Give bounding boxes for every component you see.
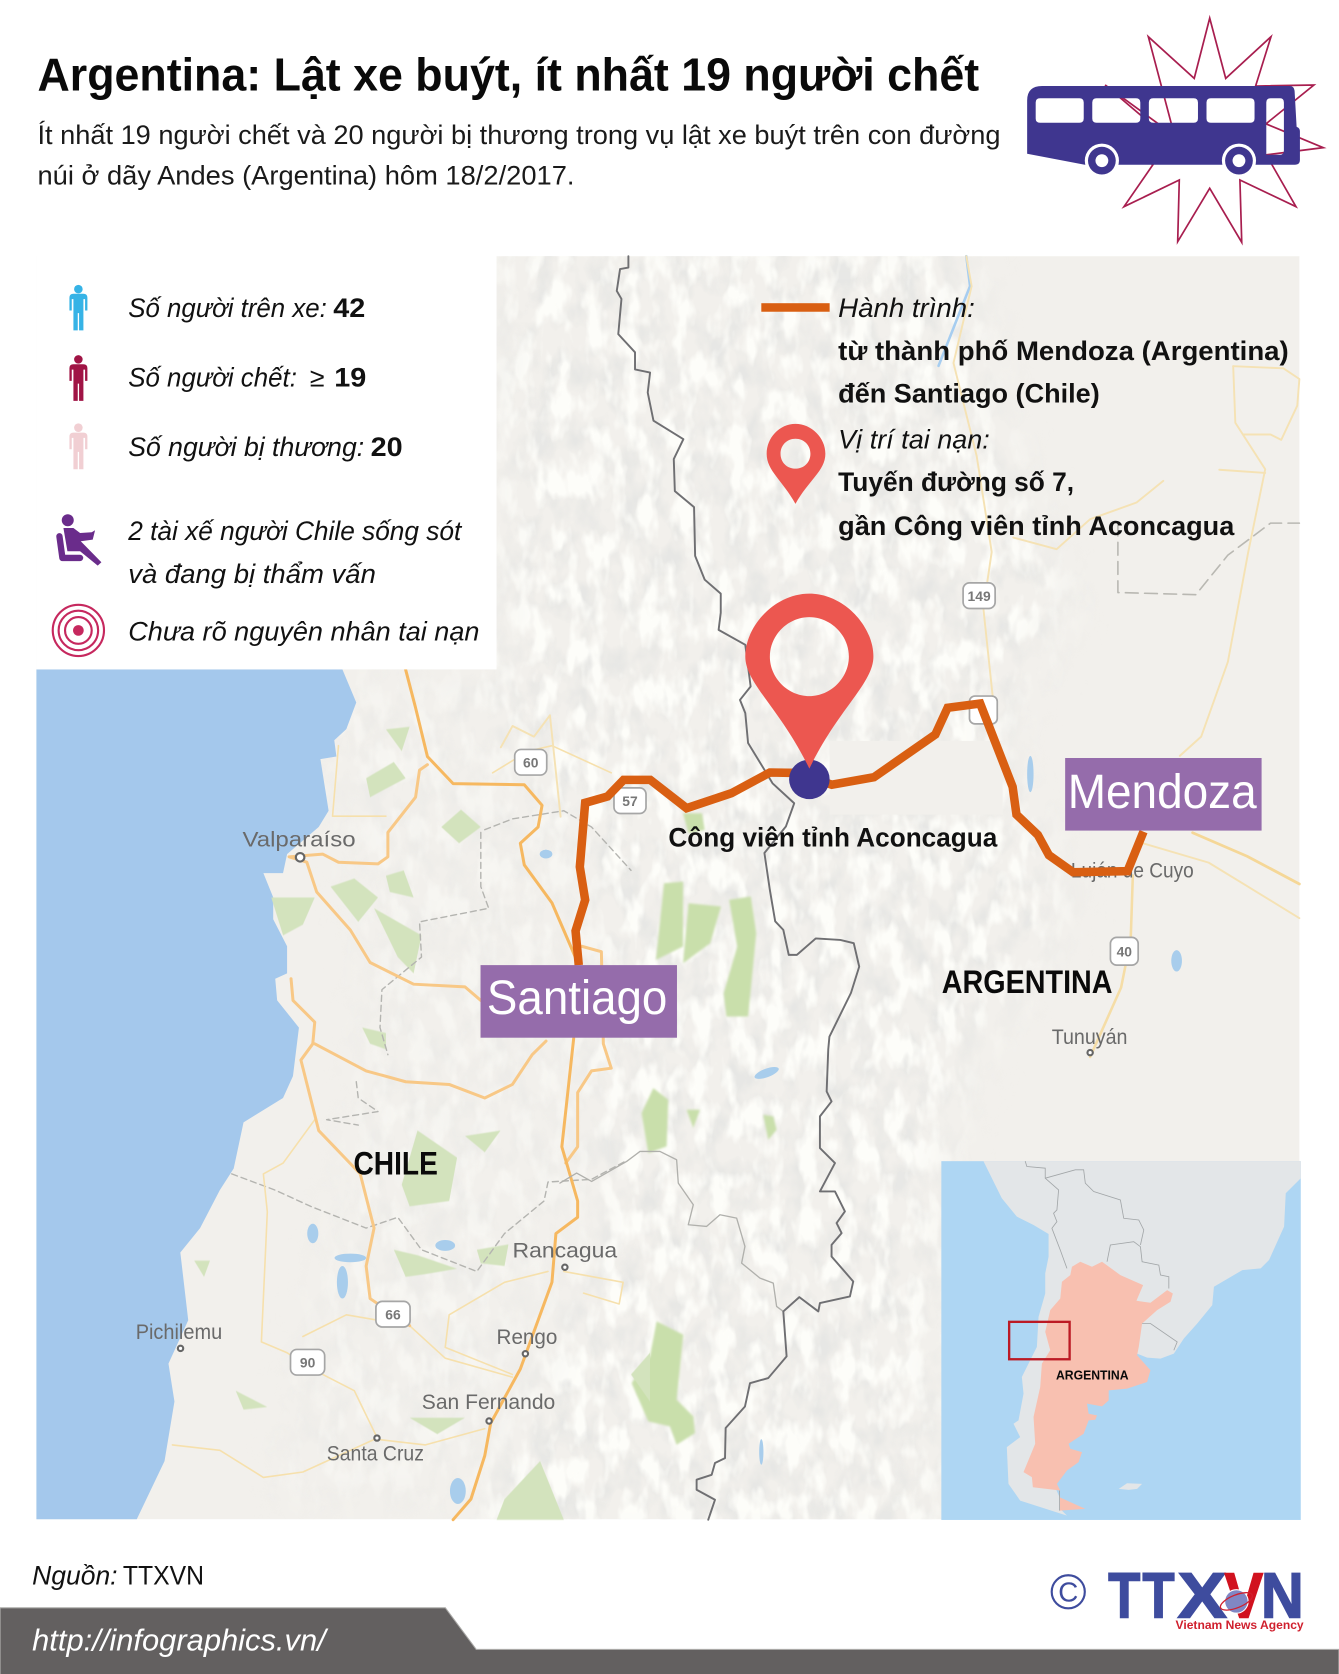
label: CHILE: CHILE	[353, 1145, 438, 1181]
label: Mendoza: Mendoza	[1068, 766, 1257, 819]
city labels: Rengo	[497, 1325, 557, 1349]
icon: person blue	[69, 294, 87, 330]
pale area around route	[830, 741, 1003, 815]
logo: TTXVN: X	[1178, 1559, 1227, 1631]
fact: injured: 20	[371, 432, 403, 462]
Pacific ocean	[36, 669, 356, 1519]
green parks west	[194, 727, 650, 1520]
road shields: 60	[523, 755, 539, 771]
fact: drivers	[127, 516, 463, 589]
road shields: 149	[968, 588, 991, 604]
icon: crashed bus with starburst	[1027, 18, 1323, 242]
label: Công viên tỉnh Aconcagua: Công viên tỉnh Aconcagua	[668, 822, 998, 853]
road shields: 57	[622, 793, 638, 809]
fact: drivers: 2 tài xế người Chile sống sót	[127, 516, 463, 546]
logo: TTXVN: Vietnam News Agency	[1176, 1618, 1304, 1632]
city labels: Santa Cruz	[327, 1441, 424, 1465]
logo: TTXVN: T	[1108, 1559, 1140, 1631]
fact: people on bus: 42	[333, 293, 365, 323]
logo: TTXVN: T	[1142, 1559, 1174, 1631]
legend: accident location: Vị trí tai nạn:	[838, 424, 990, 454]
intro text	[37, 120, 1000, 191]
fact: people on bus: Số người trên xe:	[128, 293, 327, 323]
map of Chile and Argentina	[36, 256, 1299, 1520]
source	[32, 1560, 204, 1590]
Argentina roads and Andes border	[501, 256, 1299, 1520]
road shields: 66	[385, 1307, 401, 1323]
intro text: núi ở dãy Andes (Argentina) hôm 18/2/2017.	[37, 161, 574, 191]
label: Santiago: Santiago	[487, 972, 667, 1025]
fact: injured: Số người bị thương:	[128, 432, 364, 462]
legend: route: từ thành phố Mendoza (Argentina)	[838, 336, 1289, 366]
route line Santiago to Mendoza	[576, 704, 1144, 965]
road shields: 40	[1117, 944, 1132, 960]
logo: TTXVN: C	[1058, 1576, 1078, 1607]
city labels: Valparaíso	[242, 828, 356, 852]
city labels: Luján de Cuyo	[1071, 859, 1194, 883]
legend: accident location: Tuyến đường số 7,	[838, 467, 1074, 497]
source: TTXVN	[123, 1560, 204, 1590]
label: inset ARGENTINA: ARGENTINA	[1056, 1367, 1129, 1382]
city labels	[136, 828, 1194, 1465]
city labels: San Fernando	[422, 1390, 555, 1414]
legend: route	[761, 293, 1289, 408]
legend: route: Hành trình:	[838, 293, 975, 323]
blue location dot	[789, 760, 830, 799]
fact: deaths: ≥	[310, 362, 324, 392]
label: ARGENTINA: ARGENTINA	[942, 964, 1113, 1000]
icon head blue	[74, 285, 83, 293]
fact: deaths: Số người chết:	[128, 362, 297, 392]
source: Nguồn:	[32, 1560, 118, 1590]
legend: accident location	[767, 424, 1235, 541]
city labels: Pichilemu	[136, 1320, 222, 1344]
fact: drivers: và đang bị thẩm vấn	[128, 559, 376, 589]
Argentina	[1024, 1262, 1173, 1491]
land mass	[983, 1161, 1301, 1516]
logo: TTXVN	[1052, 1559, 1304, 1632]
icon head pink	[74, 423, 83, 432]
footer bar	[0, 1608, 1339, 1674]
panel: key facts	[36, 255, 497, 669]
icon head red	[74, 355, 83, 364]
fact: deaths: 19	[334, 362, 366, 392]
title: Argentina: Lật xe buýt, ít nhất 19 người chết	[37, 49, 979, 101]
Chile roads	[172, 670, 631, 1520]
accident location pin	[745, 594, 873, 799]
icon: person pink	[69, 433, 87, 469]
legend: route: đến Santiago (Chile)	[838, 378, 1100, 408]
icon: driver with seat belt	[59, 514, 101, 566]
road shields	[291, 583, 1138, 1375]
red locator box	[1009, 1322, 1070, 1359]
inset map: South America	[941, 1161, 1301, 1520]
logo: TTXVN: V	[1225, 1559, 1263, 1631]
fact: unknown cause: Chưa rõ nguyên nhân tai nạn	[128, 617, 479, 647]
legend: accident location: gần Công viên tỉnh Aconcagua	[838, 511, 1235, 541]
icon: target	[53, 605, 104, 656]
road shields: 90	[300, 1355, 316, 1371]
icon: person dark red	[69, 364, 87, 401]
Country borders	[1025, 1161, 1177, 1511]
intro text: Ít nhất 19 người chết và 20 người bị thương trong vụ lật xe buýt trên con đường	[37, 120, 1000, 150]
website url: http://infographics.vn/	[32, 1623, 329, 1658]
city labels: Tunuyán	[1052, 1025, 1128, 1049]
logo: TTXVN: N	[1261, 1559, 1304, 1631]
city labels: Rancagua	[513, 1239, 617, 1263]
green parks central	[632, 813, 777, 1445]
